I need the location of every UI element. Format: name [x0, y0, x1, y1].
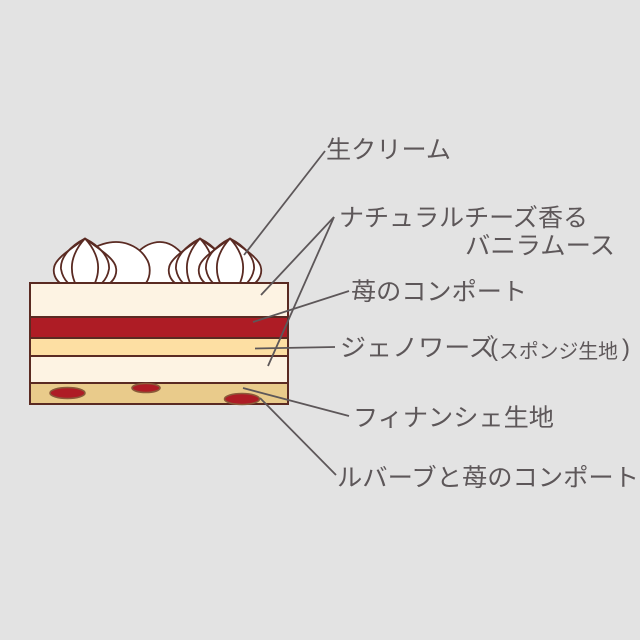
cream swirl: left — [54, 238, 116, 283]
label: strawberry compote: 苺のコンポート — [351, 278, 527, 306]
label: financier base: フィナンシェ生地 — [353, 404, 554, 432]
illustration: layered cake cross-section — [30, 238, 288, 404]
label: genoise sponge: ジェノワーズ — [340, 334, 495, 362]
compote spots — [50, 384, 260, 404]
label: natural cheese vanilla mousse: バニラムース — [465, 233, 615, 260]
label: fresh cream: 生クリーム — [326, 136, 451, 164]
cream swirl: right — [199, 238, 261, 283]
label: genoise sponge: ) — [622, 335, 630, 362]
cream swirl: middle — [169, 238, 231, 283]
leader lines — [243, 151, 349, 475]
label: genoise sponge — [340, 334, 630, 363]
label: genoise sponge: ( — [490, 335, 498, 362]
label: genoise sponge: スポンジ生地 — [499, 340, 618, 363]
label: rhubarb and strawberry compote: ルバーブと苺のコンポート — [337, 464, 639, 492]
label: natural cheese vanilla mousse: ナチュラルチーズ香る — [339, 204, 588, 232]
label: natural cheese vanilla mousse — [339, 204, 615, 260]
cake layers — [30, 283, 288, 404]
whipped cream domes — [90, 242, 184, 283]
